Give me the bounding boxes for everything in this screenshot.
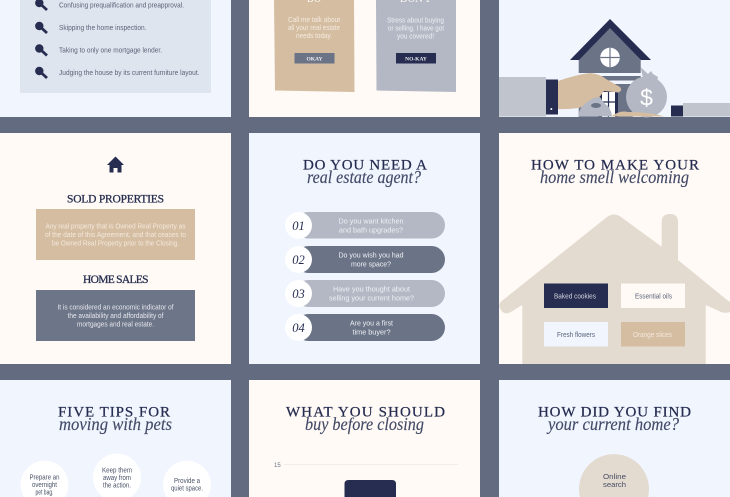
icon: home <box>107 156 124 172</box>
box: fresh flowers: Fresh flowers <box>557 332 595 339</box>
pill 04: 04 <box>292 321 305 335</box>
panel: how to make your home smell welcoming <box>499 133 730 364</box>
tip circle 2: away from <box>103 475 131 482</box>
home sales box: the availability and affordability of <box>68 313 164 320</box>
home sales box <box>36 290 195 341</box>
pill 02: Do you wish you had <box>338 252 404 260</box>
tip circle 1: pet bag. <box>36 490 54 496</box>
pill 04: time buyer? <box>352 330 391 336</box>
don't card: or selling. I have got <box>388 26 444 32</box>
circle: online search: Online <box>603 472 626 481</box>
icon: key 2 <box>35 22 47 33</box>
icon: house <box>570 19 651 117</box>
pill 02: more space? <box>351 262 391 268</box>
list box <box>20 0 211 93</box>
title: buy before closing <box>305 414 424 434</box>
don't card: Stress about buying <box>387 18 444 24</box>
list text: Judging the house by its current furniture layout. <box>59 70 200 77</box>
pill 03: selling your current home? <box>329 296 414 302</box>
title: your current home? <box>546 414 679 434</box>
pill 02 <box>285 246 445 273</box>
heading: sold properties: SOLD PROPERTIES <box>67 194 164 206</box>
box: orange slices <box>621 322 685 346</box>
pill 04: Are you a first <box>350 320 393 328</box>
title <box>286 404 445 434</box>
don't card: you covered! <box>397 34 434 40</box>
tip circle 1: Prepare an <box>30 474 60 482</box>
title <box>303 158 427 187</box>
home sales box: It is considered an economic indicator of <box>58 304 174 312</box>
icon: money bag with dollar <box>626 67 667 118</box>
title: DO YOU NEED A <box>303 158 427 174</box>
icon: small money bag <box>579 97 612 116</box>
title <box>58 404 172 434</box>
box: orange slices: Orange slices <box>633 332 672 339</box>
button: okay: OKAY <box>306 56 323 62</box>
do card <box>274 0 354 92</box>
pill 01: and bath upgrades? <box>339 228 403 234</box>
icon: left sleeve and hand <box>499 73 621 116</box>
panel: what you should buy before closing <box>249 380 480 497</box>
title <box>538 404 691 434</box>
house silhouette <box>499 214 730 364</box>
pill 03: Have you thought about <box>333 286 410 294</box>
bar chart <box>274 463 458 497</box>
sold properties box: Any real property that is Owned Real Property as <box>46 224 186 230</box>
list text: Skipping the home inspection. <box>59 25 147 32</box>
icon: money bag with dollar: $ <box>640 84 653 110</box>
bar chart: 15 <box>274 463 281 469</box>
tip circle 1 <box>21 461 68 497</box>
heading: home sales: HOME SALES <box>83 274 148 286</box>
title: real estate agent? <box>307 167 421 187</box>
circle: online search: search <box>603 480 626 489</box>
box: essential oils <box>621 284 685 308</box>
panel: how did you find your current home <box>499 380 730 497</box>
title: HOW TO MAKE YOUR <box>531 158 699 174</box>
list text: Taking to only one mortgage lender. <box>59 48 162 54</box>
pill 03: 03 <box>292 287 305 301</box>
tip circle 1: overnight <box>32 482 57 489</box>
sold properties box: be Owned Real Property prior to the Closing. <box>52 240 179 248</box>
pill 02: 02 <box>292 253 305 267</box>
do card: needs today. <box>296 33 332 40</box>
panel: mortgage mistakes list <box>0 0 231 117</box>
do card: Call me talk about <box>288 17 340 24</box>
tip circle 2: the action. <box>103 482 131 490</box>
panel: do and don't <box>249 0 480 117</box>
sold properties box: of the date of this Agreement, and that ceases to <box>45 232 186 239</box>
title: WHAT YOU SHOULD <box>286 404 445 420</box>
don't card <box>376 0 456 92</box>
title: moving with pets <box>59 414 172 434</box>
panel: hand holding house illustration <box>499 0 730 118</box>
title: FIVE TIPS FOR <box>58 404 170 420</box>
panel: five tips for moving with pets <box>0 380 231 497</box>
sold properties box <box>36 209 195 260</box>
do card: all your real estate <box>288 25 340 32</box>
tip circle 3 <box>163 461 211 497</box>
list text: Confusing prequalification and preapproval. <box>59 2 184 10</box>
panel: sold properties and home sales <box>0 133 231 364</box>
icon: key 1 <box>35 0 47 10</box>
panel: do you need a real estate agent <box>249 133 480 364</box>
pill 03 <box>285 280 445 307</box>
tip circle 3: Provide a <box>174 478 200 485</box>
pill 01 <box>285 212 445 239</box>
icon: key 3 <box>35 44 47 56</box>
box: essential oils: Essential oils <box>635 294 672 300</box>
title <box>531 158 699 187</box>
title: home smell welcoming <box>540 167 689 187</box>
icon: lower hand and right sleeve <box>611 103 730 116</box>
pill 01: 01 <box>292 219 305 233</box>
box: fresh flowers <box>544 322 608 346</box>
home sales box: mortgages and real estate. <box>77 322 154 328</box>
list text <box>59 2 200 77</box>
tip circle 3: quiet space. <box>171 486 203 492</box>
pill 01: Do you want kitchen <box>338 218 404 226</box>
box: baked cookies: Baked cookies <box>554 294 596 300</box>
tip circle 2: Keep them <box>102 468 132 474</box>
button: no-kay: NO-KAY <box>405 56 427 62</box>
tip circle 2 <box>93 454 141 497</box>
title: HOW DID YOU FIND <box>538 404 691 420</box>
box: baked cookies <box>544 284 608 308</box>
circle: online search <box>579 454 649 497</box>
icon: key 4 <box>35 67 47 78</box>
pill 04 <box>285 314 445 341</box>
